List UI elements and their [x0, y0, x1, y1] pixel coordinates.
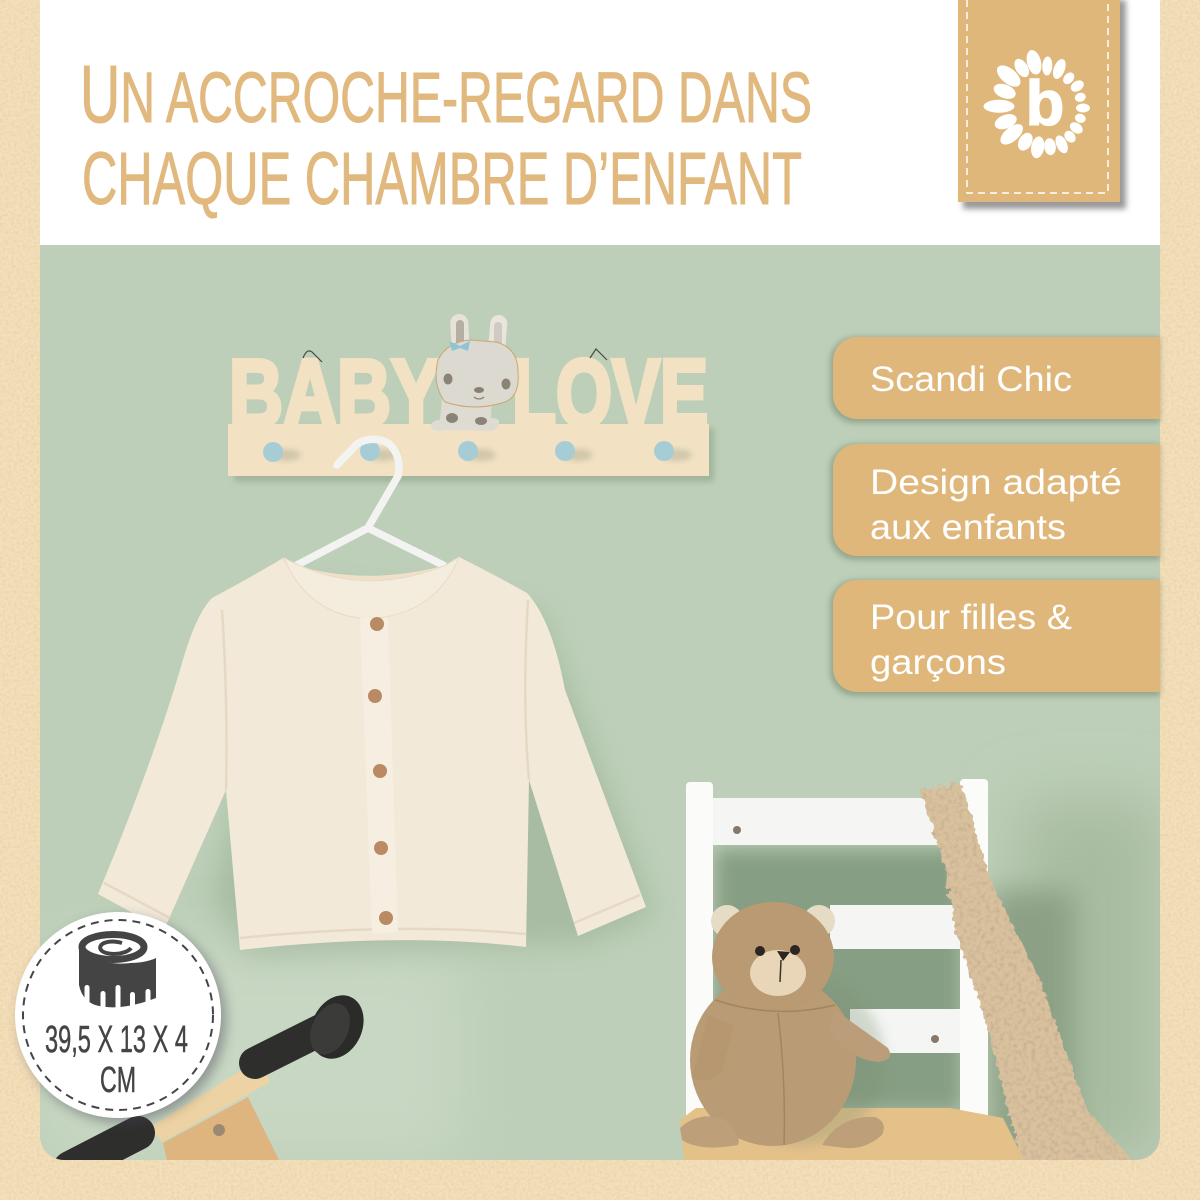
- handlebar grips: [70, 1028, 325, 1168]
- icon: measuring tape: [79, 934, 156, 1013]
- pill: Pour filles & garçons: Pour filles &: [870, 598, 1072, 637]
- bear shadow: [780, 1009, 888, 1148]
- ribbed collar: [284, 557, 459, 619]
- dimensions badge: [15, 912, 226, 1123]
- dimensions text: 39,5 X 13 X 4: [45, 1019, 188, 1061]
- icon: brand logo: b: [1026, 69, 1064, 139]
- pill: Design adapté aux enfants: Design adapté: [870, 463, 1122, 502]
- sleeve creases: [104, 600, 640, 938]
- balance bike: [70, 987, 374, 1168]
- pill: Pour filles & garçons: garçons: [870, 643, 1006, 682]
- title: [80, 49, 812, 220]
- placket: [360, 618, 398, 934]
- cardigan: [98, 557, 655, 955]
- chair rails: [712, 798, 962, 1053]
- cardigan body and sleeves: [98, 557, 646, 950]
- bunny: [431, 314, 518, 431]
- rack words: [232, 356, 707, 424]
- chair: [680, 779, 1024, 1160]
- brand tag: [958, 0, 1126, 209]
- pill: Design adapté aux enfants: [830, 444, 1160, 560]
- rack board: [228, 424, 709, 476]
- hanger: [297, 439, 443, 565]
- bike frame: [163, 1097, 279, 1160]
- rack words: BABY: [229, 339, 441, 446]
- hook knobs: [263, 441, 692, 462]
- photo panel: [40, 245, 1160, 1168]
- plush bear: [680, 902, 890, 1148]
- buttons: [368, 617, 393, 925]
- feature pills: [830, 337, 1160, 696]
- pill: Pour filles & garçons: [830, 580, 1160, 696]
- pill: Design adapté aux enfants: aux enfants: [870, 508, 1066, 547]
- sherpa blanket: [921, 785, 1137, 1165]
- hanging wires: [303, 349, 607, 362]
- title: CHAQUE CHAMBRE D’ENFANT: [82, 137, 802, 220]
- chair posts: [686, 782, 713, 1122]
- pill: Scandi Chic: Scandi Chic: [870, 360, 1072, 399]
- wall: [40, 245, 1160, 1160]
- icon: brand logo: [984, 48, 1090, 159]
- chair seat: [680, 1108, 1024, 1160]
- pill: Scandi Chic: [830, 337, 1160, 423]
- header panel: [40, 0, 1160, 245]
- rack words: LOVE: [512, 339, 708, 446]
- coat rack: [228, 314, 714, 482]
- inner collar: [310, 566, 442, 580]
- title: UN ACCROCHE-REGARD DANS: [80, 49, 812, 140]
- cardigan shadow: [210, 585, 655, 955]
- coat rack shadow: [234, 428, 714, 482]
- dimensions badge: CM: [100, 1059, 136, 1100]
